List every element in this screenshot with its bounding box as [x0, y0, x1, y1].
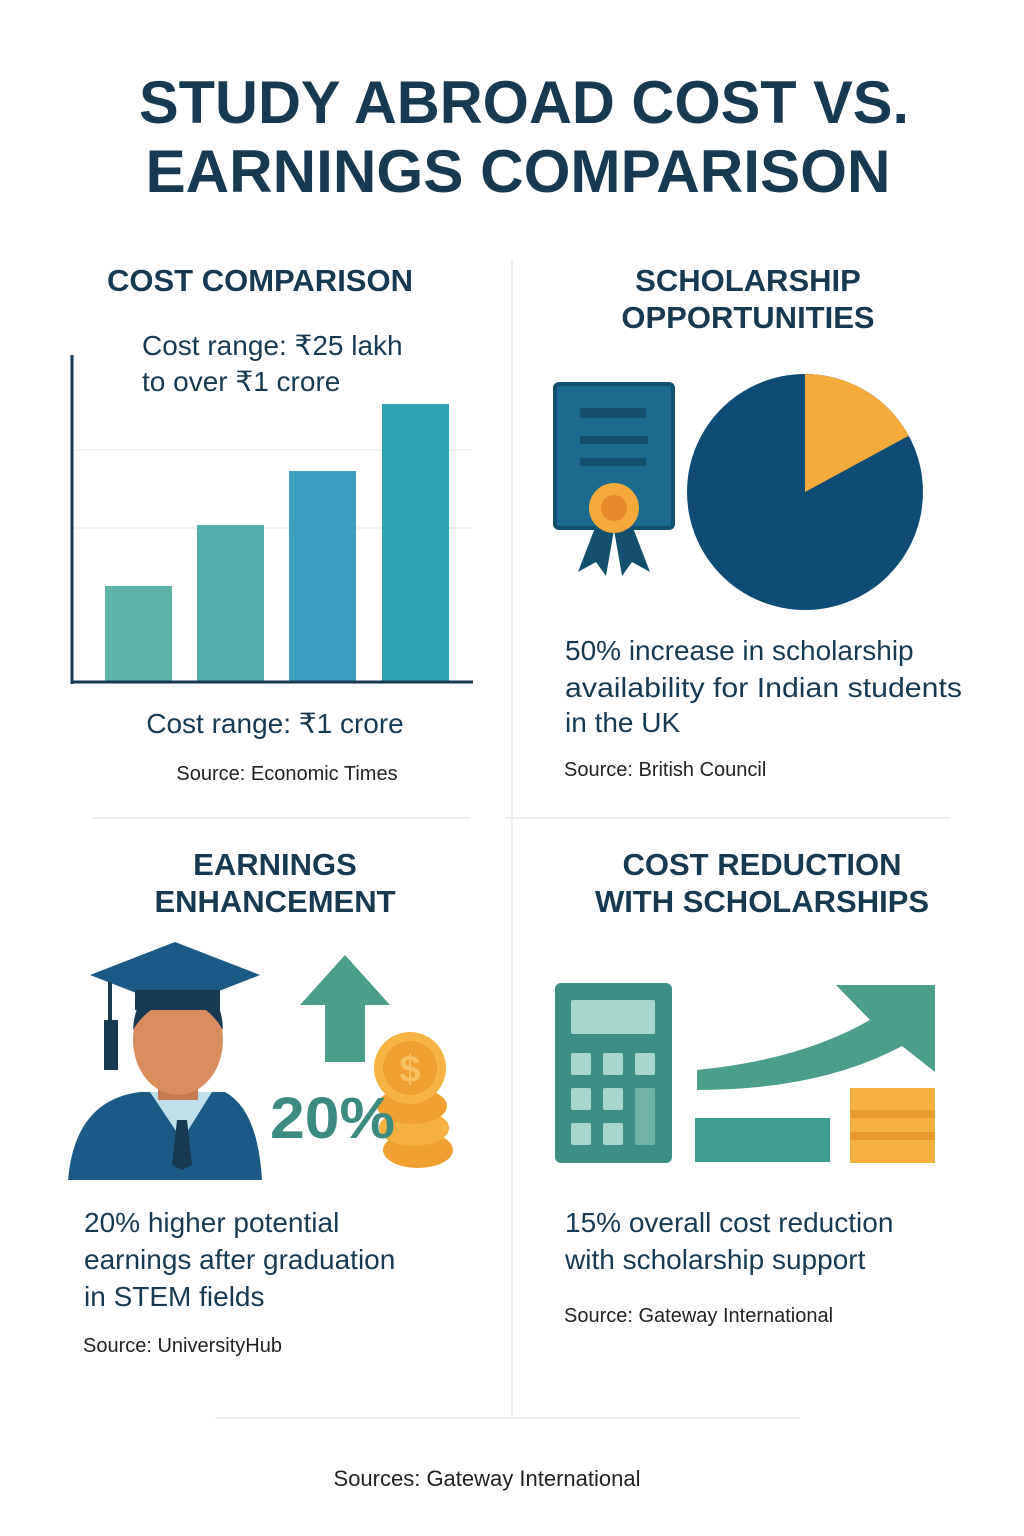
text: scholarship stat: availability for Indian students: [565, 672, 962, 703]
title: [139, 69, 909, 205]
icon: graduate: [68, 942, 262, 1180]
text: earnings stat: earnings after graduation: [84, 1244, 395, 1275]
icon: coins: [374, 1032, 453, 1168]
icon: calculator: [555, 983, 672, 1163]
heading: scholarship: OPPORTUNITIES: [621, 300, 875, 335]
title: STUDY ABROAD COST VS.: [139, 69, 909, 136]
heading: earnings: EARNINGS: [193, 847, 357, 882]
source: Source: Economic Times: [176, 763, 398, 785]
source: Source: Gateway International: [564, 1305, 833, 1327]
text: cost range top: Cost range: ₹25 lakh: [142, 330, 403, 361]
source: Source: British Council: [564, 759, 766, 781]
icon: up arrow: [300, 955, 390, 1062]
text: scholarship stat: in the UK: [565, 707, 680, 738]
icon: curved arrow: [697, 985, 935, 1090]
heading: scholarship: [621, 263, 875, 335]
text: scholarship stat: [565, 635, 962, 738]
bar chart: [71, 355, 473, 684]
icon: bar: [695, 1118, 830, 1162]
text: earnings stat: [84, 1207, 395, 1312]
footer source: Sources: Gateway International: [334, 1466, 640, 1491]
text: scholarship stat: 50% increase in scholarship: [565, 635, 914, 666]
heading: scholarship: SCHOLARSHIP: [635, 263, 861, 298]
text: cost range top: to over ₹1 crore: [142, 366, 340, 397]
heading: cost reduction: [595, 847, 929, 919]
heading: cost reduction: COST REDUCTION: [622, 847, 902, 882]
icon: certificate: [555, 384, 673, 576]
panel: cost comparison: [71, 263, 473, 785]
heading: cost reduction: WITH SCHOLARSHIPS: [595, 884, 929, 919]
title: EARNINGS COMPARISON: [146, 138, 890, 205]
icon: coins: $: [399, 1049, 421, 1091]
heading: earnings: [154, 847, 396, 919]
heading: cost comparison: COST COMPARISON: [107, 263, 413, 298]
text: cost range bottom: Cost range: ₹1 crore: [146, 708, 404, 739]
pie chart: [687, 374, 923, 610]
source: Source: UniversityHub: [83, 1335, 282, 1357]
panel: earnings enhancement: [68, 847, 453, 1357]
panel: cost reduction: [555, 847, 935, 1327]
text: reduction stat: 15% overall cost reduction: [565, 1207, 893, 1238]
heading: earnings: ENHANCEMENT: [154, 884, 396, 919]
panel: scholarship opportunities: [555, 263, 962, 781]
text: cost range top: [142, 330, 403, 397]
icon: money block: [850, 1088, 935, 1163]
text: 20%: 20%: [270, 1086, 395, 1151]
text: earnings stat: in STEM fields: [84, 1281, 264, 1312]
text: reduction stat: [564, 1207, 893, 1275]
text: reduction stat: with scholarship support: [564, 1244, 866, 1275]
text: earnings stat: 20% higher potential: [84, 1207, 339, 1238]
